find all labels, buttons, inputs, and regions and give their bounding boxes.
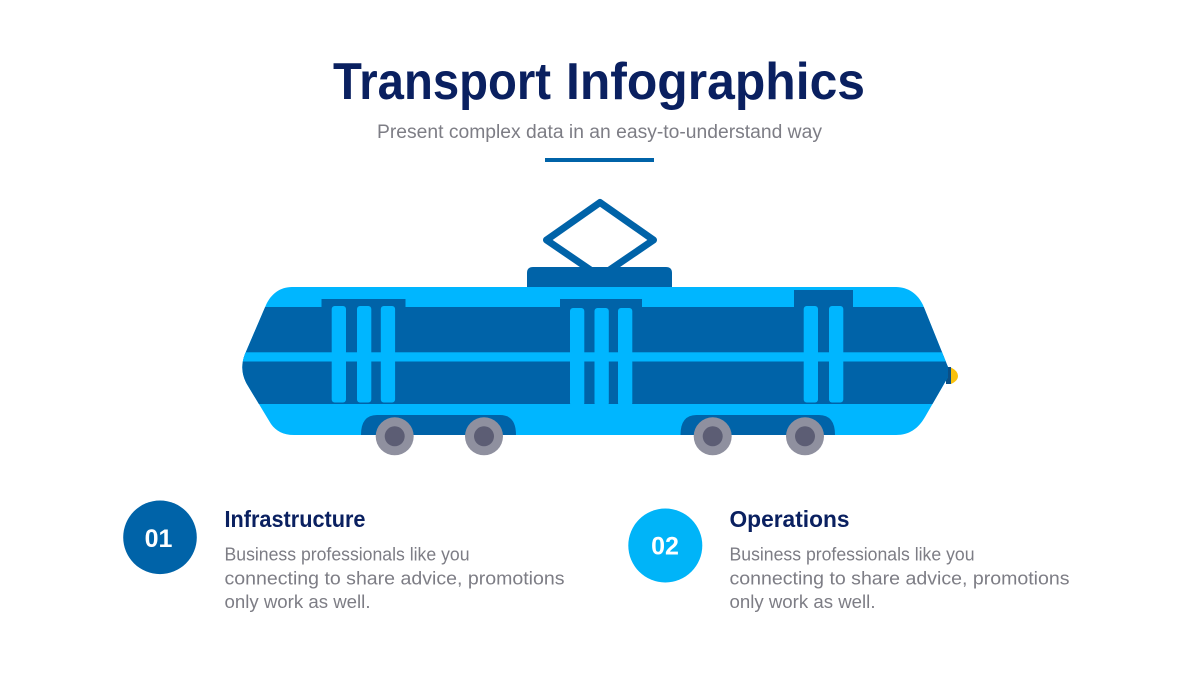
description: operations: connecting to share advice, promotions [730, 567, 1070, 588]
description: operations [730, 544, 1070, 612]
description: infrastructure: Business professionals like you [224, 544, 470, 565]
description: infrastructure [224, 544, 564, 612]
title divider [545, 158, 654, 162]
number badge 01: 01 [145, 525, 172, 553]
roof unit [527, 267, 672, 287]
description: infrastructure: connecting to share advice, promotions [224, 567, 564, 588]
right door [804, 306, 843, 402]
subtitle: Present complex data in an easy-to-understand way [377, 122, 822, 143]
left bogie [361, 415, 516, 455]
description: operations: Business professionals like you [730, 544, 974, 565]
middle door [570, 308, 632, 406]
side stripe [235, 352, 955, 362]
icon: tram [235, 202, 958, 455]
tram body [235, 287, 955, 435]
title: Infographics [566, 53, 865, 111]
headlight [946, 367, 958, 384]
window band [235, 307, 955, 404]
pantograph [546, 202, 654, 276]
description: infrastructure: only work as well. [224, 591, 370, 612]
panel: infrastructure [123, 500, 564, 612]
number badge 01 [123, 500, 197, 574]
heading: infrastructure: Infrastructure [224, 506, 366, 532]
right bogie [680, 415, 835, 455]
panel: operations [628, 506, 1070, 612]
description: operations: only work as well. [730, 591, 876, 612]
number badge 02 [628, 508, 702, 582]
title [333, 53, 865, 111]
title: Transport [333, 53, 551, 111]
number badge 02: 02 [651, 532, 679, 560]
heading: operations: Operations [730, 506, 850, 532]
door headers [322, 290, 853, 308]
left door [332, 306, 395, 402]
